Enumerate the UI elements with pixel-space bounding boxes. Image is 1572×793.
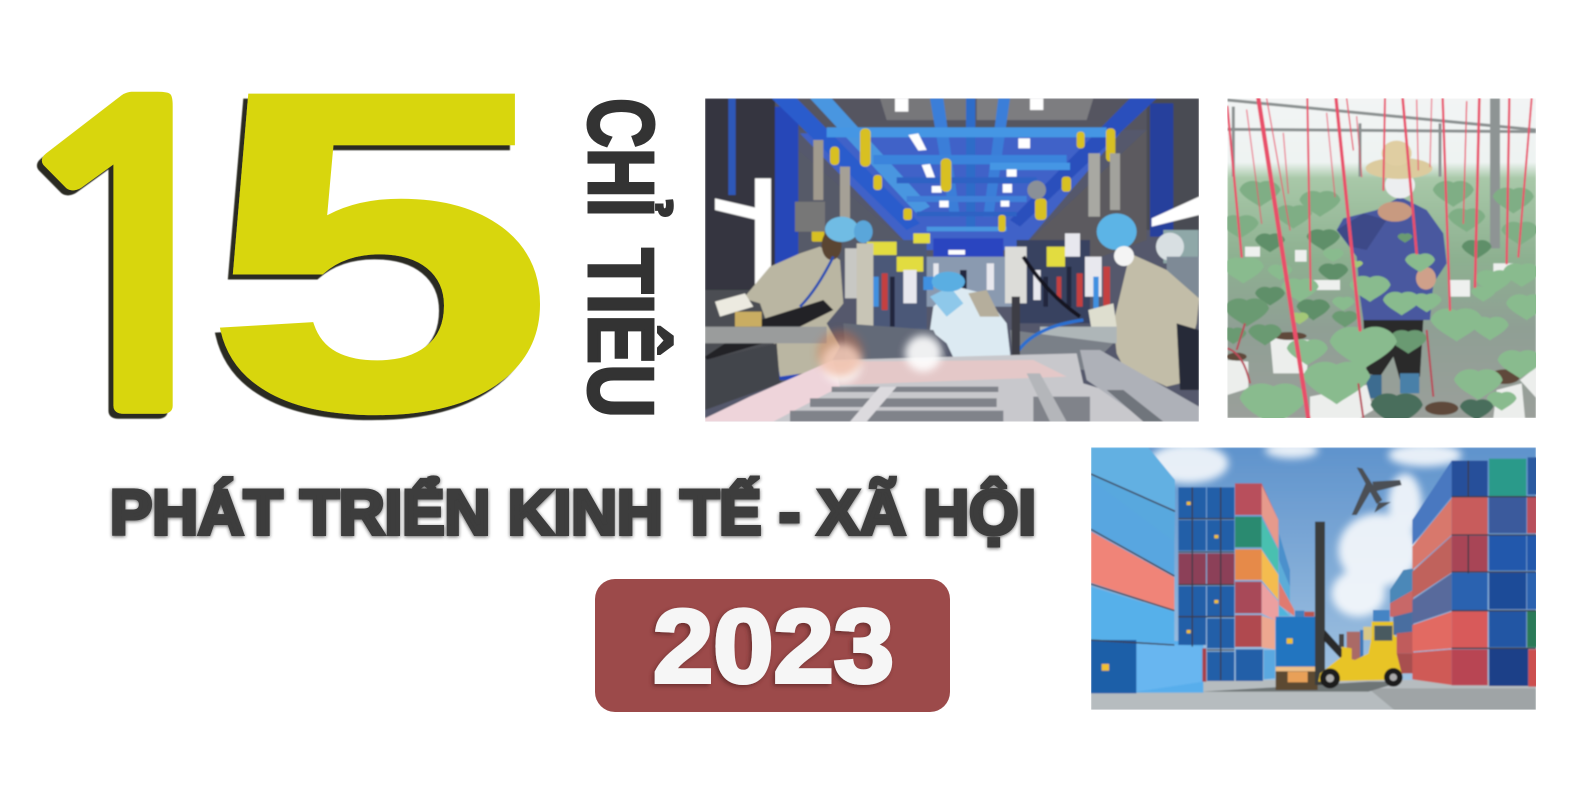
big number 15 — [0, 0, 554, 504]
heading: phát triển kinh tế - xã hội: PHÁT TRIỂN KINH TẾ - XÃ HỘI — [110, 477, 1036, 548]
photo: container port with forklift and plane — [1091, 442, 1538, 711]
photo: car factory workers — [705, 98, 1199, 422]
vertical label: chỉ tiêu: CHỈ — [569, 98, 673, 217]
big number 15: 5 — [205, 0, 554, 504]
busy mid-line machinery — [863, 233, 1110, 337]
infographic canvas — [36, 92, 1536, 712]
year badge — [595, 579, 950, 712]
vertical label: chỉ tiêu — [569, 98, 673, 418]
photo: farmer in greenhouse — [1220, 98, 1547, 426]
vertical label: chỉ tiêu: TIÊU — [569, 248, 673, 418]
year label: 2023 — [653, 589, 894, 705]
